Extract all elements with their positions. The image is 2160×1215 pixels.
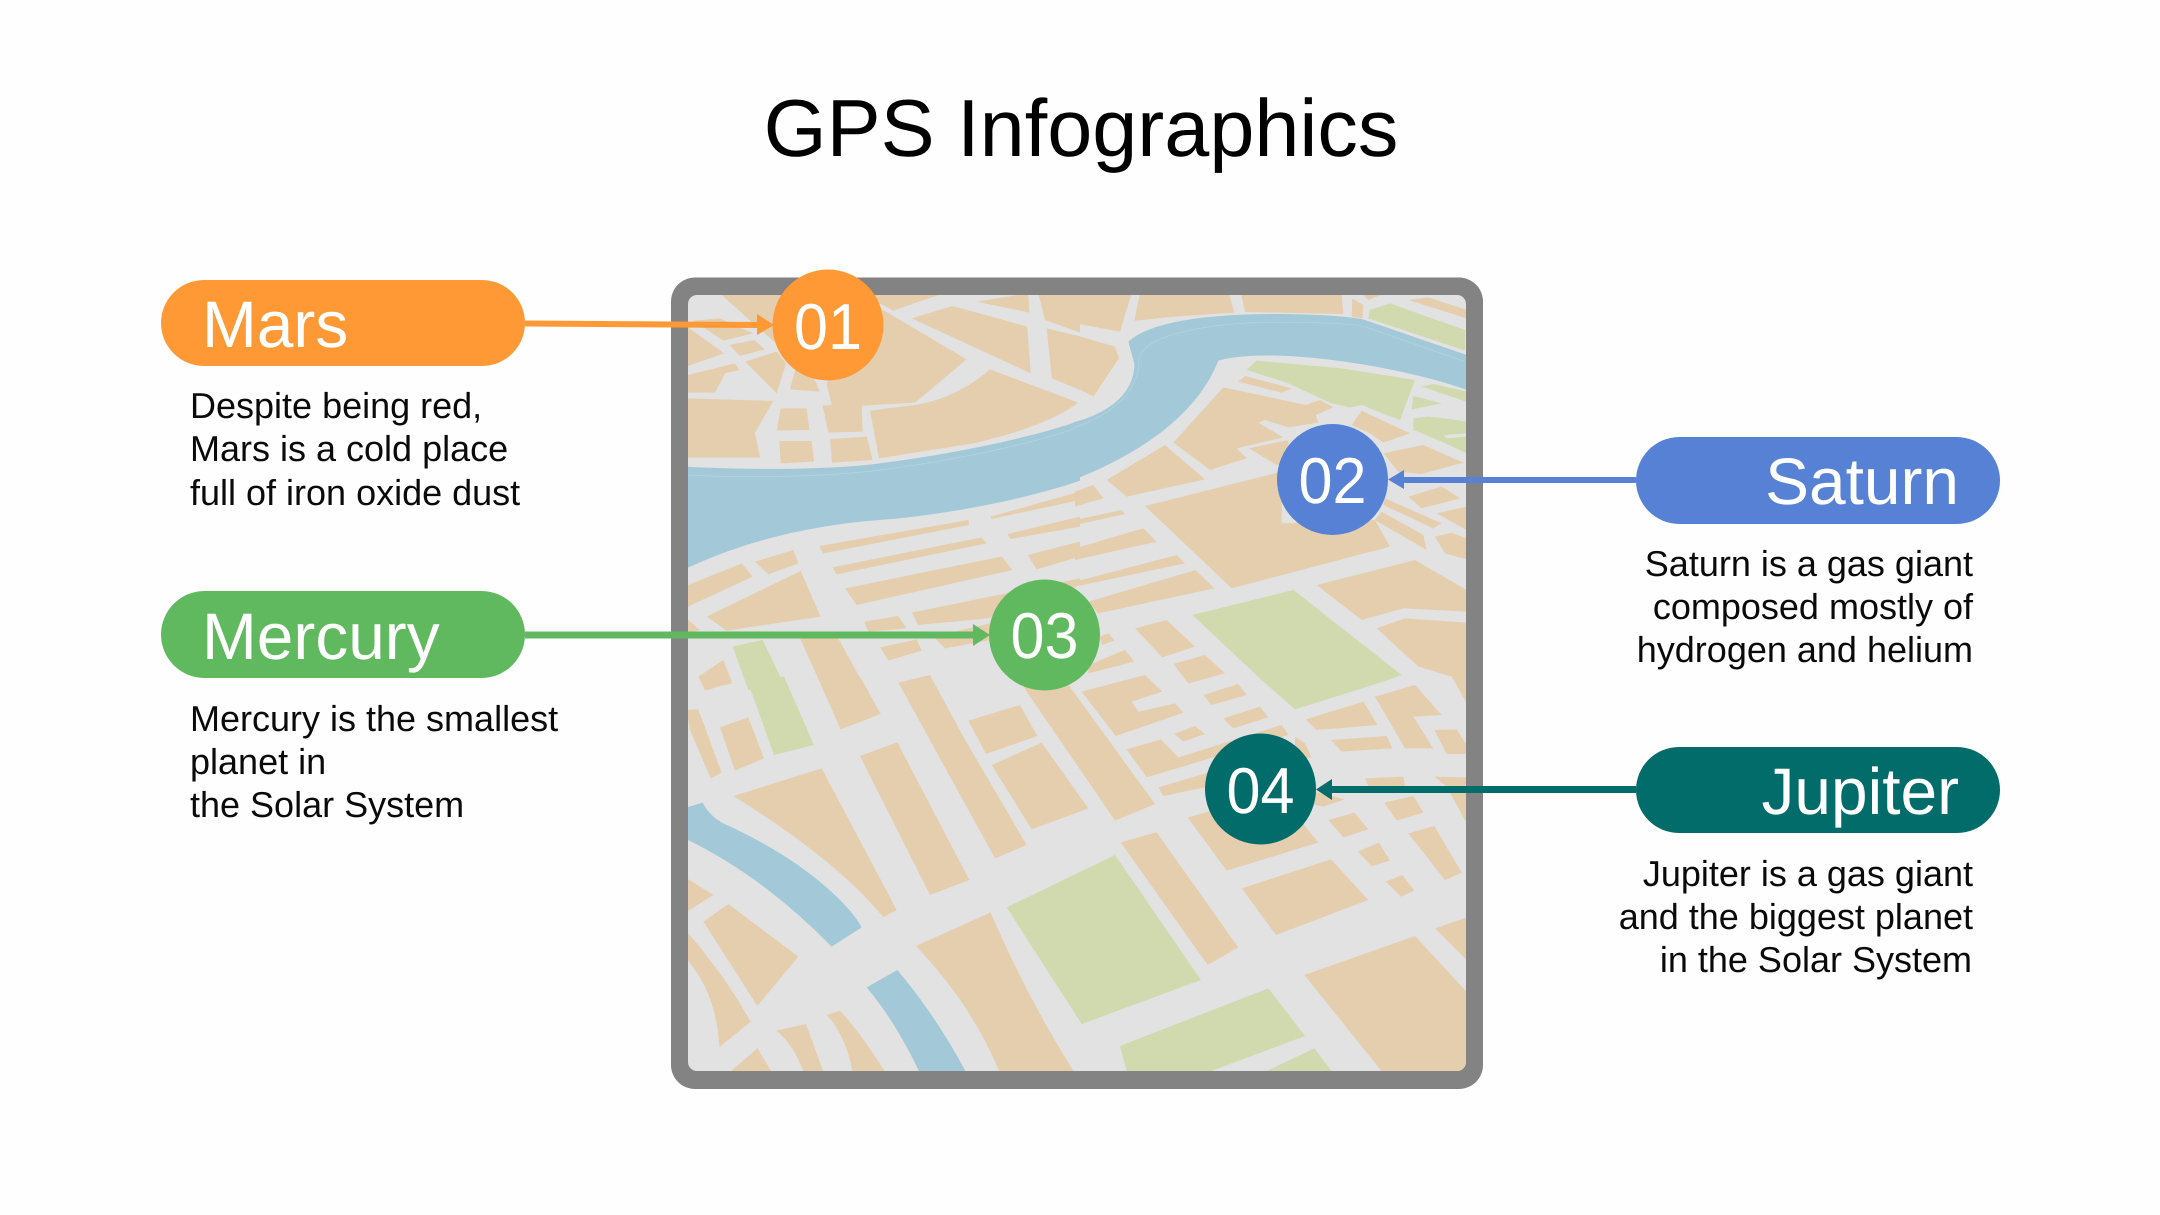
- Saturn description: composed mostly of: [1653, 586, 1974, 627]
- Mars description: [190, 385, 520, 513]
- Saturn description: Saturn is a gas giant: [1645, 543, 1973, 584]
- map frame: [671, 278, 1483, 1089]
- marker 04: 04: [1226, 754, 1294, 827]
- marker 01: 01: [794, 290, 862, 363]
- Jupiter description: [1619, 853, 1973, 980]
- Mercury description: planet in: [190, 741, 326, 782]
- street map: [687, 293, 1467, 1083]
- Saturn description: [1637, 543, 1974, 670]
- panel: Saturn: [1277, 424, 2000, 670]
- marker 01: [772, 270, 884, 380]
- marker 03: 03: [1010, 599, 1078, 672]
- Jupiter label: Jupiter: [1762, 754, 1959, 828]
- Saturn pill: [1636, 437, 2000, 524]
- Mars pill: [161, 280, 525, 366]
- panel: Mars: [161, 270, 884, 513]
- Mercury label: Mercury: [202, 599, 440, 673]
- Mercury description: Mercury is the smallest: [190, 698, 558, 739]
- Saturn label: Saturn: [1765, 444, 1959, 518]
- Mars description: full of iron oxide dust: [190, 472, 520, 513]
- marker 04: [1205, 734, 1316, 844]
- Mercury description: [190, 698, 558, 825]
- Mars description: Despite being red,: [190, 385, 482, 426]
- Mars label: Mars: [202, 287, 348, 361]
- panel: Jupiter: [1205, 734, 2000, 980]
- Jupiter pill: [1636, 747, 2000, 833]
- Mercury pill: [161, 591, 525, 678]
- title: GPS Infographics: [764, 84, 1398, 174]
- panel: map with frame: [671, 278, 1483, 1089]
- arrow: Mercury to 03: [525, 624, 990, 646]
- marker 02: 02: [1298, 444, 1366, 517]
- Jupiter description: in the Solar System: [1660, 939, 1972, 980]
- Jupiter description: and the biggest planet: [1619, 896, 1973, 937]
- Saturn description: hydrogen and helium: [1637, 629, 1973, 670]
- Mercury description: the Solar System: [190, 784, 464, 825]
- arrow: Saturn to 02: [1388, 470, 1636, 489]
- arrow: Mars to 01: [525, 314, 774, 335]
- arrow: Jupiter to 04: [1316, 779, 1636, 800]
- marker 02: [1277, 424, 1388, 535]
- Mars description: Mars is a cold place: [190, 428, 508, 469]
- Jupiter description: Jupiter is a gas giant: [1643, 853, 1973, 894]
- panel: Mercury: [161, 580, 1100, 825]
- marker 03: [989, 580, 1100, 690]
